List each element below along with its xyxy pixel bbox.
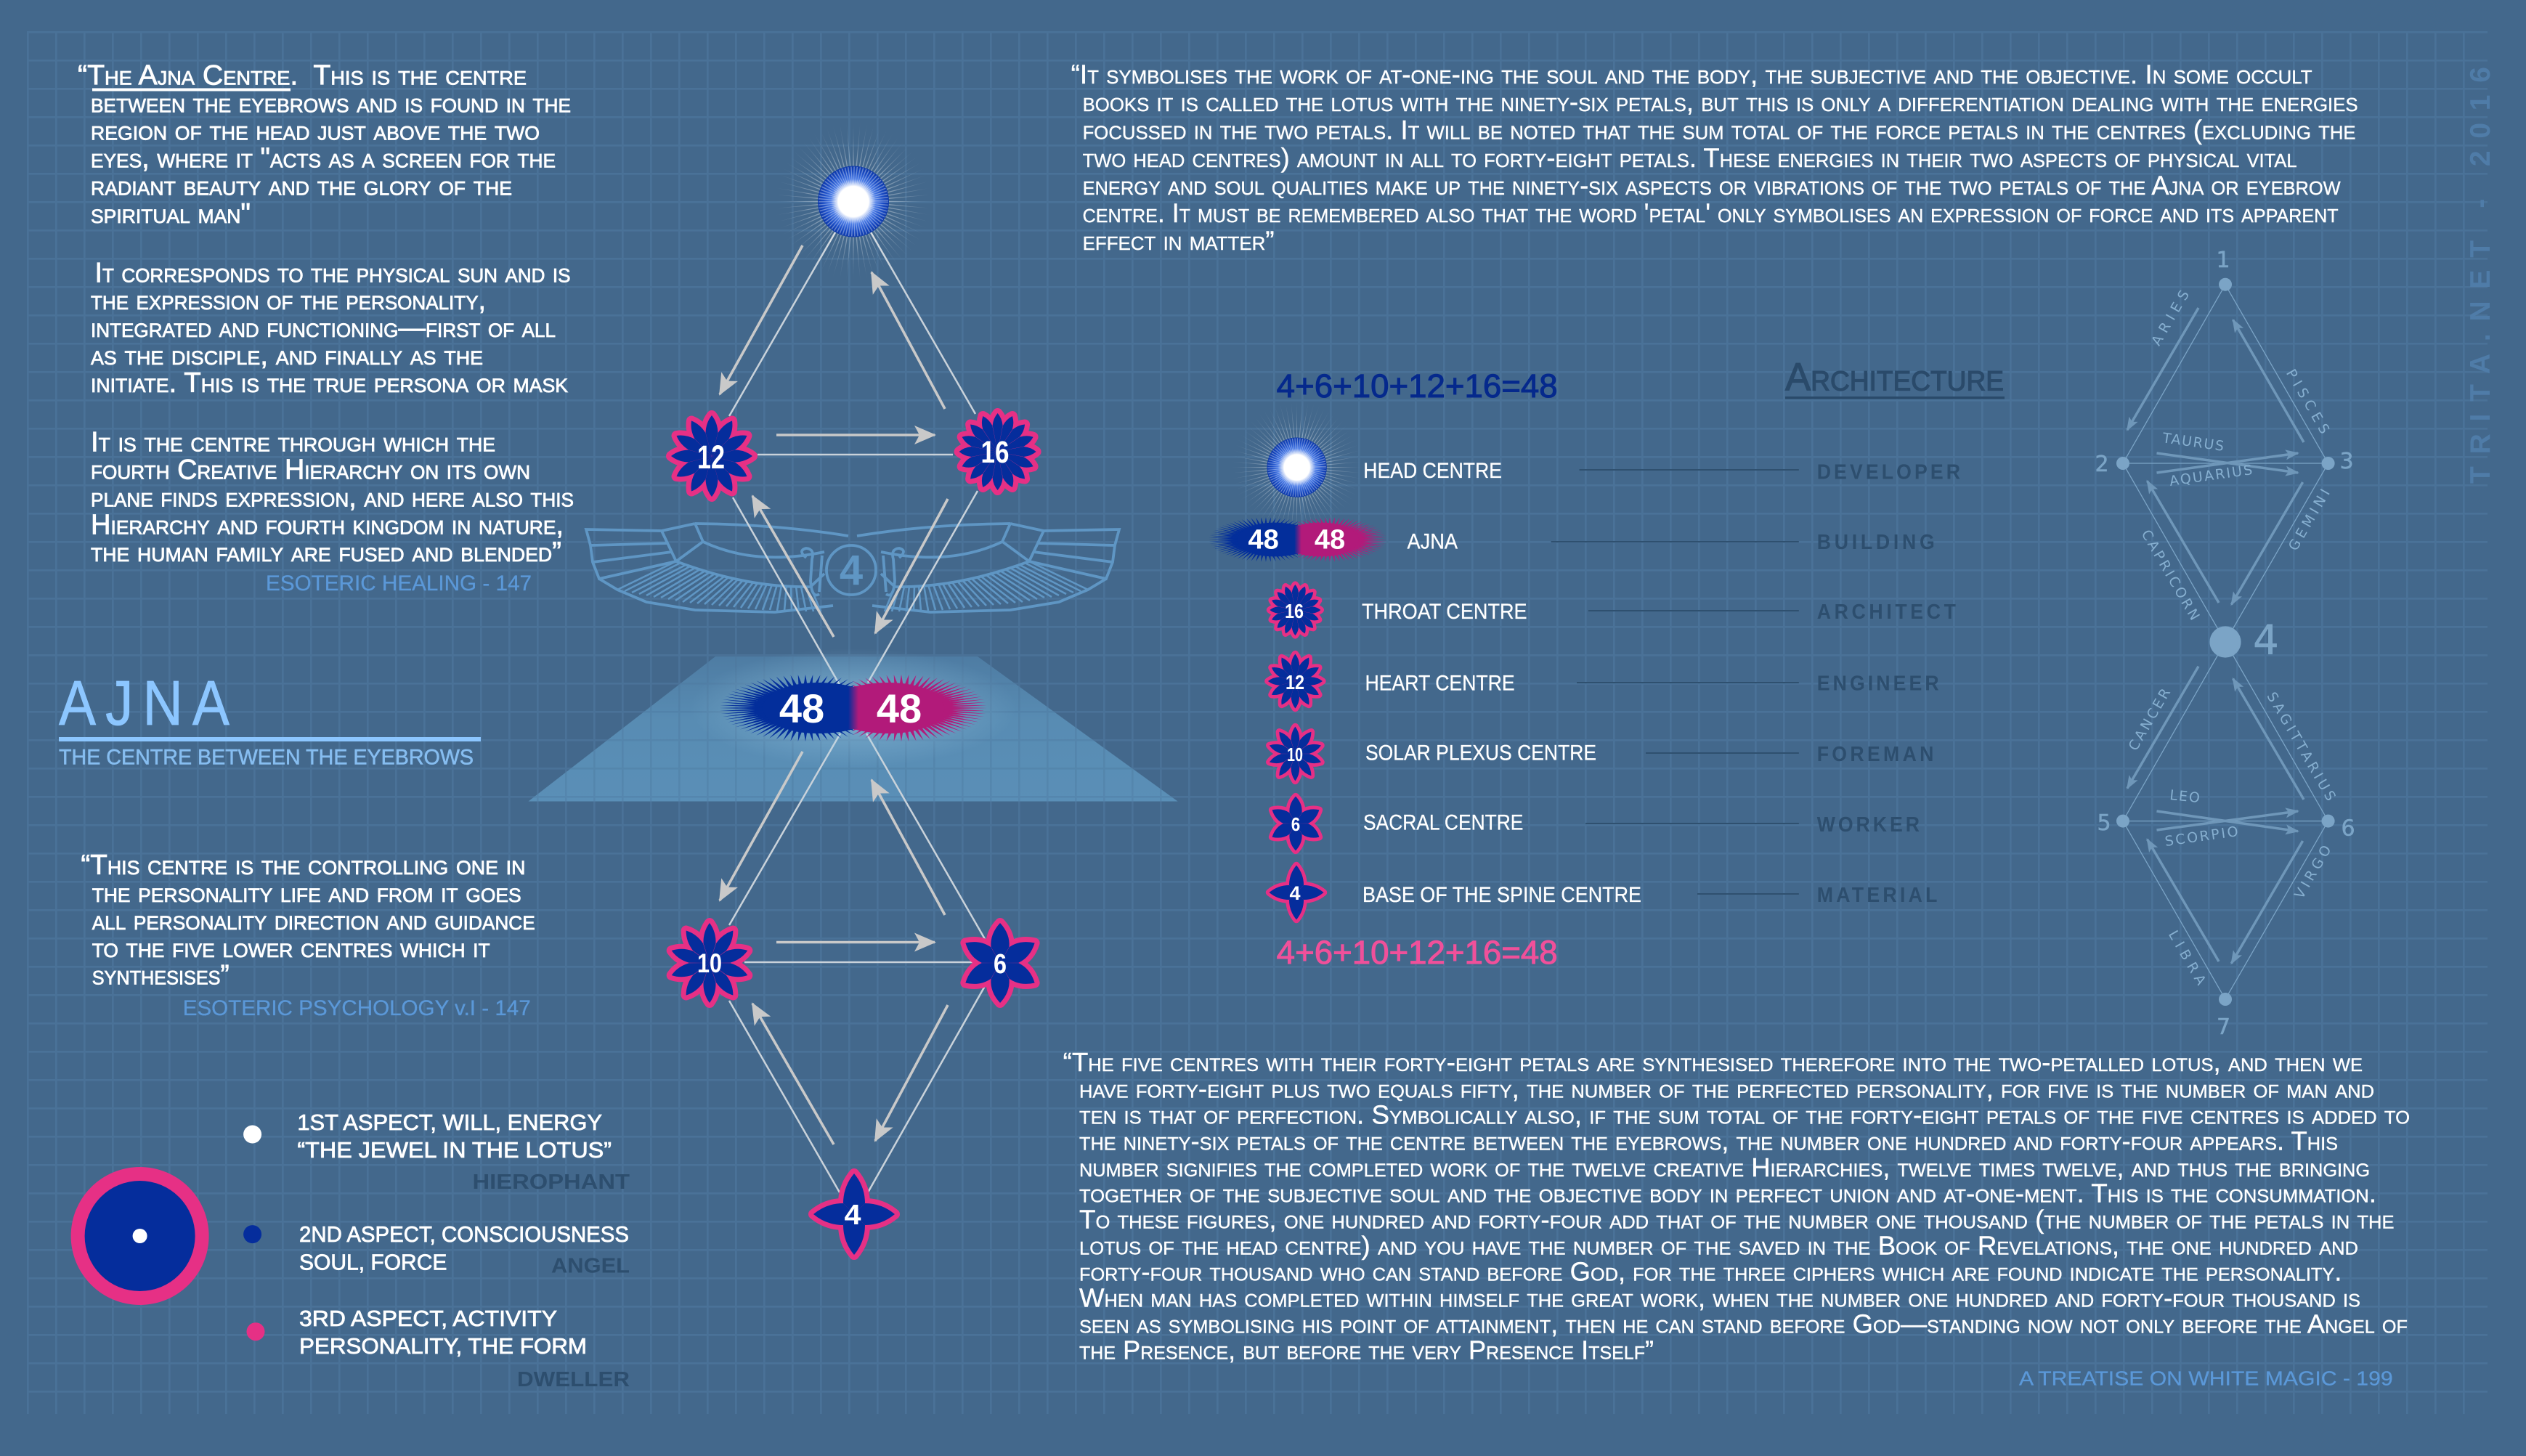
panel: aspects legend (71, 1110, 630, 1391)
panel: personality quote: synthesises” (92, 960, 230, 991)
paragraph 1: eyes, where it "acts as a screen for the (91, 143, 556, 174)
zodiac labels: AQUARIUS (2169, 462, 2254, 489)
row: base of the spine centre: 4 (1290, 882, 1300, 904)
label: hierophant: HIEROPHANT (472, 1171, 630, 1194)
nodes (2116, 278, 2335, 1006)
zodiac arrows (2127, 308, 2304, 964)
paragraph 1: radiant beauty and the glory of the (91, 171, 512, 202)
icon: solar plexus centre 10: 10 (697, 948, 722, 978)
panel: top right quote (1071, 60, 2358, 256)
paragraph 2: It corresponds to the physical sun and is (94, 257, 571, 289)
heading: architecture: Architecture (1785, 355, 2004, 399)
citation: treatise on white magic: A TREATISE ON WHITE MAGIC - 199 (2019, 1367, 2393, 1390)
zodiac labels: CAPRICORN (2138, 527, 2203, 623)
panel: personality quote: to the five lower centres which it (92, 932, 490, 964)
icon: blue dot (243, 1225, 261, 1243)
title word: AJNA (59, 668, 230, 739)
icon: ajna two-petal lotus (712, 672, 995, 744)
icon: winged sun emblem: 4 (840, 547, 863, 594)
row: head centre: HEAD CENTRE (1363, 459, 1502, 483)
row: ajna: 48 (1248, 524, 1279, 555)
label: angel: ANGEL (551, 1255, 630, 1278)
panel: centres legend (1203, 395, 1960, 920)
icon: ajna two-petal lotus: 48 (877, 686, 922, 731)
panel: top right quote: centre. It must be remembered also that the word 'petal' only symbolises an expression of force and its apparent (1083, 198, 2339, 228)
diagram: central plane trapezoid (529, 656, 1178, 802)
icon: heart centre 12 (671, 415, 752, 497)
row: sacral centre: 6 (1291, 813, 1300, 835)
paragraph 3: fourth Creative Hierarchy on its own (91, 454, 530, 485)
row: heart centre: HEART CENTRE (1365, 672, 1515, 696)
panel: bottom right quote: the Presence, but before the very Presence Itself” (1079, 1335, 1654, 1365)
panel: bottom right quote: To these figures, one hundred and forty-four add that of the number one thousand (the number of the petals in the (1079, 1205, 2394, 1235)
icon: base centre 4 (813, 1174, 895, 1255)
row: solar plexus centre (1268, 727, 1933, 781)
icon: ajna two-petal lotus: 48 (779, 686, 824, 731)
row: ajna: BUILDING (1817, 530, 1935, 553)
paragraph 1: “The Ajna Centre. This is the centre (78, 60, 527, 91)
panel: top right quote: effect in matter” (1083, 226, 1275, 256)
paragraph 1: between the eyebrows and is found in the (91, 87, 571, 119)
icon: heart centre 12: 12 (697, 439, 725, 476)
diagram: zodiac double diamond (2095, 248, 2355, 1040)
row: base of the spine centre (1269, 865, 1937, 920)
icon: concentric lotus jewel (71, 1167, 209, 1305)
panel: personality quote (81, 850, 535, 991)
row: base of the spine centre: MATERIAL (1817, 883, 1937, 906)
row: sacral centre: SACRAL CENTRE (1363, 810, 1523, 835)
panel: bottom right quote: ten is that of perfection. Symbolically also, if the sum total of the forty-eight petals of the five centres is added to (1079, 1100, 2410, 1130)
node numbers: 2 (2095, 452, 2109, 477)
paragraph 2 (91, 257, 571, 399)
panel: top right quote: “It symbolises the work of at-one-ing the soul and the body, the subjective and the objective. In some occult (1071, 60, 2312, 89)
row: solar plexus centre: 10 (1287, 744, 1303, 765)
second aspect text: 2ND ASPECT, CONSCIOUSNESS (299, 1221, 629, 1247)
row: ajna: 48 (1315, 524, 1345, 555)
watermark: trita.net - 2016: TRITA.NET - 2016 (2465, 67, 2496, 484)
zodiac labels: LEO (2169, 787, 2201, 806)
panel: bottom right quote: When man has completed within himself the great work, when the number one hundred and forty-four thousand is (1079, 1282, 2360, 1312)
panel: bottom right quote: lotus of the head centre) and you have the number of the saved in the Book of Revelations, the one hundred and (1079, 1231, 2358, 1261)
row: ajna: AJNA (1408, 530, 1458, 553)
third aspect text (299, 1306, 587, 1359)
formula: pink sum: 4+6+10+12+16=48 (1277, 934, 1558, 971)
first aspect text: 1ST ASPECT, WILL, ENERGY (297, 1110, 602, 1135)
zodiac labels: TAURUS (2161, 430, 2225, 455)
row: throat centre (1270, 585, 1956, 635)
row: heart centre: ENGINEER (1817, 672, 1939, 695)
paragraph 3 (91, 427, 574, 568)
paragraph 1: region of the head just above the two (91, 115, 540, 147)
first aspect text (297, 1110, 612, 1163)
row: solar plexus centre: FOREMAN (1817, 742, 1933, 765)
panel: top right quote: focussed in the two petals. It will be noted that the sum total of the force petals in the centres (excluding the (1083, 115, 2356, 145)
title underline (59, 737, 481, 741)
node numbers: 3 (2339, 449, 2354, 474)
zodiac labels: SAGITTARIUS (2263, 689, 2339, 804)
paragraph 2: as the disciple, and finally as the (91, 340, 483, 371)
panel: Ajna centre quote (78, 60, 574, 568)
zodiac labels (2126, 288, 2339, 988)
node numbers: 5 (2097, 810, 2111, 836)
panel: top right quote: two head centres) amount in all to forty-eight petals. These energies in their two aspects of physical vital (1083, 143, 2297, 173)
panel: bottom right quote: number signifies the completed work of the twelve creative Hierarchies, twelve times twelve, and thus the bringing (1079, 1152, 2370, 1182)
paragraph 3: plane finds expression, and here also this (91, 482, 574, 513)
paragraph 1 (78, 60, 571, 229)
zodiac labels: SCORPIO (2164, 823, 2239, 850)
citation: esoteric psychology: ESOTERIC PSYCHOLOGY v.I - 147 (183, 996, 531, 1020)
row: base of the spine centre: BASE OF THE SPINE CENTRE (1363, 883, 1641, 907)
row: sacral centre: WORKER (1817, 813, 1920, 836)
zodiac labels: CANCER (2126, 686, 2174, 754)
panel: top right quote: energy and soul qualities make up the ninety-six aspects or vibrations of the two petals of the Ajna or eyebrow (1083, 171, 2341, 200)
node numbers: 6 (2341, 816, 2355, 842)
paragraph 2: initiate. This is the true persona or mask (91, 367, 568, 399)
panel: bottom right quote: “The five centres with their forty-eight petals are synthesised therefore into the two-petalled lotus, and then we (1063, 1047, 2363, 1077)
panel: bottom right quote: the ninety-six petals of the centre between the eyebrows, the number one hundred and forty-four appears. This (1079, 1126, 2338, 1156)
title: AJNA (59, 668, 481, 770)
label: dweller: DWELLER (517, 1368, 630, 1391)
panel: personality quote: “This centre is the controlling one in (81, 850, 525, 881)
third aspect text: PERSONALITY, THE FORM (299, 1333, 587, 1359)
icon: head centre (767, 115, 940, 288)
row: throat centre: ARCHITECT (1817, 600, 1956, 623)
paragraph 1: spiritual man" (91, 198, 251, 229)
panel: bottom right quote (1063, 1047, 2410, 1365)
icon: pink dot (247, 1322, 264, 1341)
paragraph 3: Hierarchy and fourth kingdom in nature, (91, 509, 564, 540)
decoration: grid showing through plane (529, 656, 1178, 802)
icon: winged sun emblem (586, 524, 1119, 612)
third aspect text: 3RD ASPECT, ACTIVITY (299, 1306, 557, 1331)
formula: blue sum: 4+6+10+12+16=48 (1277, 367, 1558, 404)
zodiac labels: GEMINI (2286, 487, 2334, 553)
diagram: connecting lines (729, 232, 985, 1192)
paragraph 3: It is the centre through which the (91, 427, 495, 458)
panel: personality quote: the personality life and from it goes (92, 877, 521, 908)
icon: throat centre 16 (959, 413, 1036, 490)
icon: white dot (243, 1126, 261, 1143)
row: throat centre: THROAT CENTRE (1362, 600, 1527, 624)
row: head centre (1225, 395, 1960, 540)
row: sacral centre (1269, 797, 1920, 850)
panel: bottom right quote: have forty-eight plus two equals fifty, the number of the perfected personality, for five is the number of man and (1079, 1074, 2374, 1104)
zodiac labels: PISCES (2283, 367, 2332, 436)
panel: bottom right quote: seen as symbolising his point of attainment, then he can stand before God—standing now not only before the Angel of (1079, 1309, 2408, 1338)
zodiac labels: ARIES (2148, 288, 2193, 349)
paragraph 3: the human family are fused and blended” (91, 537, 561, 568)
second aspect text (299, 1221, 629, 1274)
zodiac labels: LIBRA (2165, 928, 2209, 988)
icon: throat centre 16: 16 (980, 435, 1010, 470)
zodiac labels: VIRGO (2291, 842, 2335, 902)
panel: bottom right quote: forty-four thousand who can stand before God, for the three ciphers which are found indicate the personality. (1079, 1256, 2342, 1286)
row: ajna (1203, 515, 1935, 564)
row: throat centre: 16 (1285, 600, 1304, 622)
icon: base centre 4: 4 (844, 1200, 861, 1231)
citation: esoteric healing: ESOTERIC HEALING - 147 (266, 572, 532, 595)
first aspect text: “THE JEWEL IN THE LOTUS” (297, 1137, 612, 1163)
second aspect text: SOUL, FORCE (299, 1249, 447, 1274)
quote underline (92, 89, 291, 91)
icon: sacral centre 6 (961, 923, 1039, 1003)
panel: personality quote: all personality direction and guidance (92, 905, 535, 936)
row: solar plexus centre: SOLAR PLEXUS CENTRE (1365, 741, 1596, 765)
row: heart centre (1268, 654, 1939, 709)
node numbers: 4 (2253, 617, 2279, 664)
diagram: energy flow arrows (720, 245, 948, 1144)
node numbers: 1 (2216, 248, 2230, 273)
row: head centre: DEVELOPER (1817, 460, 1960, 484)
icon: sacral centre 6: 6 (994, 949, 1007, 980)
subtitle: THE CENTRE BETWEEN THE EYEBROWS (59, 745, 474, 770)
panel: top right quote: books it is called the lotus with the ninety-six petals, but this is only a differentiation dealing with the energies (1083, 87, 2358, 117)
paragraph 2: integrated and functioning—first of all (91, 312, 556, 343)
node numbers: 7 (2217, 1014, 2230, 1040)
panel: bottom right quote: together of the subjective soul and the objective body in perfect union and at-one-ment. This is the consummation. (1079, 1179, 2376, 1208)
node numbers (2095, 248, 2355, 1040)
diamond lines (2123, 285, 2328, 999)
glow behind ajna (690, 648, 1017, 768)
row: heart centre: 12 (1286, 671, 1304, 694)
paragraph 2: the expression of the personality, (91, 285, 486, 316)
icon: solar plexus centre 10 (670, 923, 750, 1003)
